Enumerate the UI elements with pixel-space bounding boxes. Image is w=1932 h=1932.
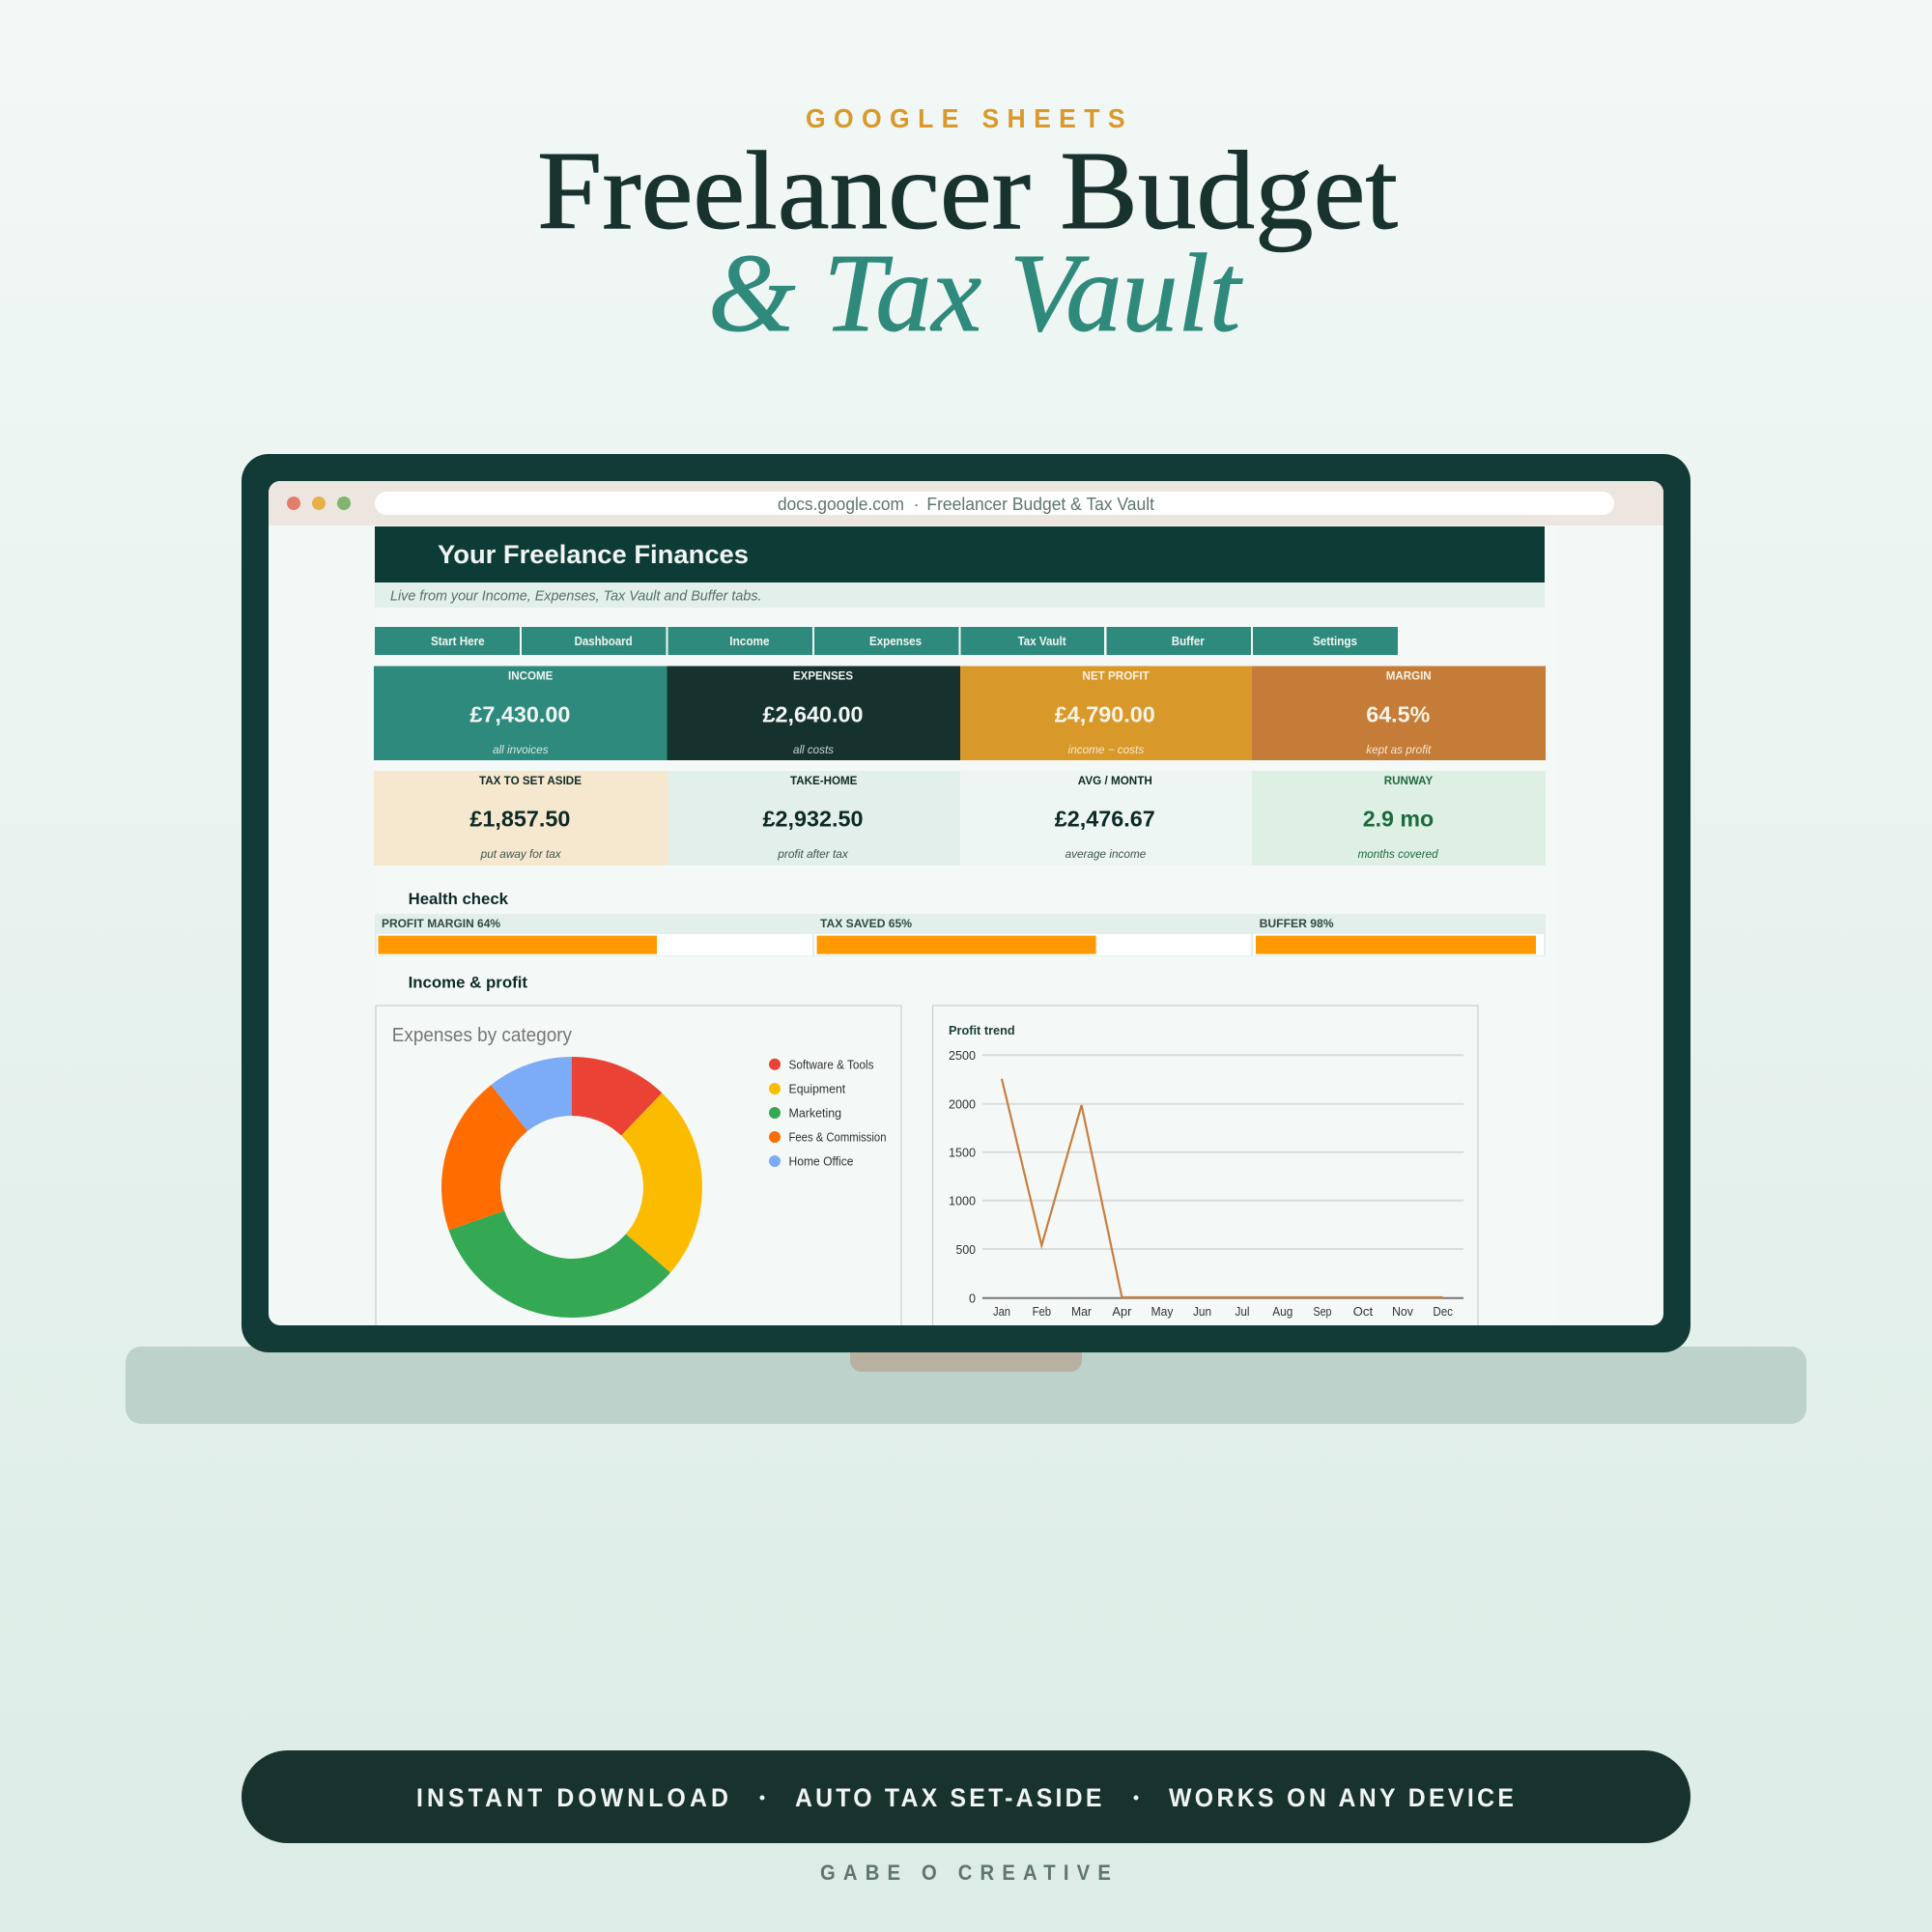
x axis labels: Apr <box>1112 1304 1132 1319</box>
navigation tabs: Settings <box>1313 635 1357 648</box>
KPI card: margin: 64.5% <box>1366 701 1430 726</box>
tax saved meter <box>817 919 1096 954</box>
navigation tabs: Expenses <box>869 635 922 648</box>
laptop base <box>126 1347 1806 1424</box>
profit margin meter <box>379 919 657 954</box>
legend: Home Office <box>788 1155 854 1169</box>
KPI card: expenses <box>667 667 960 760</box>
KPI card: take-home <box>668 771 960 866</box>
x axis labels: Dec <box>1433 1304 1453 1319</box>
KPI card: net profit: NET PROFIT <box>1082 668 1150 682</box>
window dot red <box>287 497 300 510</box>
x axis labels: Nov <box>1392 1304 1413 1319</box>
feature: works on any device: WORKS ON ANY DEVICE <box>1169 1784 1514 1812</box>
address text: Freelancer Budget & Tax Vault <box>926 495 1154 514</box>
KPI card: net profit: income − costs <box>1068 745 1144 756</box>
profit margin meter: PROFIT MARGIN 64% <box>382 919 500 930</box>
KPI card: runway: months covered <box>1358 849 1438 861</box>
KPI card: income: all invoices <box>493 745 549 756</box>
x axis labels: Feb <box>1033 1304 1051 1319</box>
KPI card: take-home: TAKE-HOME <box>790 774 857 787</box>
KPI card: take-home: £2,932.50 <box>763 806 864 831</box>
KPI card: income: £7,430.00 <box>469 701 570 726</box>
x axis labels <box>993 1306 1453 1318</box>
title line 2: & Tax Vault <box>708 232 1243 355</box>
buffer meter <box>1256 919 1536 954</box>
title line 1: Freelancer Budget <box>537 129 1398 253</box>
banner subtitle: Live from your Income, Expenses, Tax Vault and Buffer tabs. <box>390 589 761 605</box>
y axis labels: 2500 <box>949 1048 976 1063</box>
KPI card: tax to set aside: TAX TO SET ASIDE <box>479 774 582 787</box>
footer brand: GABE O CREATIVE <box>820 1861 1111 1885</box>
donut <box>441 1057 702 1318</box>
health check table <box>375 914 1546 956</box>
tax saved meter: TAX SAVED 65% <box>820 919 912 930</box>
KPI card: expenses: EXPENSES <box>793 668 853 682</box>
x axis labels: Mar <box>1071 1304 1093 1319</box>
KPI card: runway <box>1252 771 1546 866</box>
KPI card: income: INCOME <box>508 668 553 682</box>
separator dot <box>1134 1795 1138 1801</box>
KPI card: expenses: all costs <box>793 745 834 756</box>
panel: expenses donut chart <box>376 1006 901 1334</box>
navigation tabs: Buffer <box>1172 635 1205 648</box>
KPI card: net profit: £4,790.00 <box>1055 701 1155 726</box>
x axis labels: Aug <box>1272 1304 1293 1319</box>
laptop hinge notch <box>850 1348 1082 1372</box>
navigation tabs: Dashboard <box>575 635 633 648</box>
navigation tabs <box>375 627 1398 655</box>
legend: Equipment <box>788 1082 846 1095</box>
panel: profit trend line chart <box>933 1006 1478 1334</box>
heading: income and profit: Income & profit <box>409 974 528 991</box>
legend <box>769 1059 887 1169</box>
y axis labels: 0 <box>969 1291 976 1306</box>
feature pill <box>242 1750 1690 1843</box>
window dot green <box>337 497 351 510</box>
chart title: Profit trend <box>949 1023 1015 1037</box>
laptop bezel <box>242 454 1690 1352</box>
feature: instant download: INSTANT DOWNLOAD <box>416 1784 728 1812</box>
x axis labels: Oct <box>1353 1304 1374 1319</box>
KPI card: tax to set aside: £1,857.50 <box>469 806 570 831</box>
KPI card: tax to set aside: put away for tax <box>480 849 562 861</box>
eyebrow: Google Sheets: GOOGLE SHEETS <box>806 102 1125 133</box>
x axis labels: Jun <box>1193 1304 1211 1319</box>
y axis labels: 1000 <box>949 1194 976 1208</box>
legend: Software & Tools <box>788 1059 873 1072</box>
KPI card: average per month <box>1055 776 1154 860</box>
profit line <box>1002 1079 1443 1297</box>
legend: Fees & Commission <box>788 1130 887 1144</box>
KPI card: margin: kept as profit <box>1366 745 1432 756</box>
spreadsheet content <box>374 526 1546 1334</box>
legend: Marketing <box>788 1107 841 1121</box>
KPI card: margin: MARGIN <box>1386 668 1432 682</box>
x axis labels: Sep <box>1314 1304 1331 1319</box>
navigation tabs: Income <box>729 635 770 648</box>
KPI card: average per month: £2,476.67 <box>1055 806 1155 831</box>
feature: auto tax set-aside: AUTO TAX SET-ASIDE <box>795 1784 1101 1812</box>
KPI card: expenses: £2,640.00 <box>763 701 864 726</box>
x axis labels: May <box>1151 1304 1174 1319</box>
address pill <box>375 492 1614 515</box>
y axis labels: 1500 <box>949 1146 976 1159</box>
heading: health check: Health check <box>409 891 509 908</box>
banner subtitle <box>375 582 1545 608</box>
KPI card: income <box>374 667 667 760</box>
KPI card: average per month: average income <box>1065 849 1146 861</box>
address text: · <box>914 495 920 514</box>
banner title: Your Freelance Finances <box>438 540 749 569</box>
KPI card: margin <box>1252 667 1546 760</box>
separator dot <box>759 1795 765 1801</box>
x axis labels: Jul <box>1235 1304 1250 1319</box>
navigation tabs: Tax Vault <box>1018 635 1066 648</box>
KPI card: average per month: AVG / MONTH <box>1078 774 1152 787</box>
laptop screen <box>269 481 1663 1334</box>
navigation tabs: Start Here <box>431 635 485 648</box>
y axis labels: 2000 <box>949 1097 976 1111</box>
KPI card: take-home: profit after tax <box>777 849 849 861</box>
KPI card: runway: RUNWAY <box>1384 774 1433 787</box>
y axis labels <box>949 1048 976 1306</box>
KPI card: tax to set aside <box>374 771 668 866</box>
x axis labels: Jan <box>993 1304 1010 1319</box>
KPI card: net profit <box>960 667 1252 760</box>
address text <box>779 497 1154 514</box>
browser bar <box>269 481 1663 526</box>
chart title: Expenses by category <box>392 1025 572 1046</box>
KPI card: runway: 2.9 mo <box>1363 806 1434 831</box>
header block <box>537 102 1398 355</box>
address text: docs.google.com <box>778 495 904 514</box>
buffer meter: BUFFER 98% <box>1260 919 1334 930</box>
y axis labels: 500 <box>956 1242 976 1257</box>
sheet banner <box>375 526 1545 582</box>
window dot amber <box>312 497 326 510</box>
